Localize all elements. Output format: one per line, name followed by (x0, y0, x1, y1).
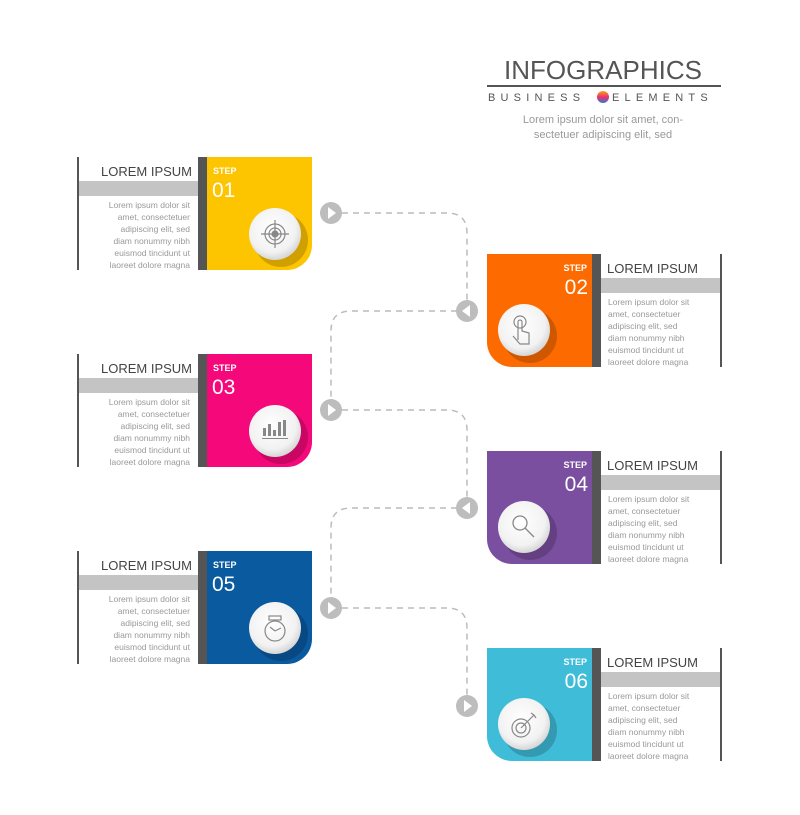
connector path (331, 213, 467, 695)
step 02: STEP (563, 263, 587, 273)
step 01: adipiscing elit, sed (121, 224, 190, 234)
step 02: laoreet dolore magna (608, 357, 689, 367)
step 03: Lorem ipsum dolor sit (109, 397, 191, 407)
step 05: laoreet dolore magna (110, 654, 190, 664)
step 03: 03 (212, 376, 235, 399)
title: sectetuer adipiscing elit, sed (534, 129, 672, 141)
step 02 (487, 254, 722, 367)
title: INFOGRAPHICS (504, 55, 702, 85)
step 06: laoreet dolore magna (608, 751, 689, 761)
icon: hand pointer (513, 316, 529, 344)
title: BUSINESS (488, 92, 585, 104)
step 06: adipiscing elit, sed (608, 715, 678, 725)
step 06: euismod tincidunt ut (608, 739, 684, 749)
step 02: amet, consectetuer (608, 309, 680, 319)
step 05: 05 (212, 573, 235, 596)
step 01: 01 (212, 179, 235, 202)
step 06: STEP (563, 657, 587, 667)
step 03: STEP (213, 363, 237, 373)
step 02: LOREM IPSUM (607, 261, 698, 276)
step 04: laoreet dolore magna (608, 554, 689, 564)
step 03: diam nonummy nibh (113, 433, 190, 443)
icon: magnifier (513, 516, 534, 537)
step 01 (77, 157, 312, 270)
step 03 (77, 354, 312, 467)
step 01: STEP (213, 166, 237, 176)
step 04: Lorem ipsum dolor sit (608, 494, 690, 504)
step 06: 06 (565, 670, 588, 693)
step 01: Lorem ipsum dolor sit (109, 200, 191, 210)
step 04: adipiscing elit, sed (608, 518, 678, 528)
step 06: Lorem ipsum dolor sit (608, 691, 690, 701)
step 02: diam nonummy nibh (608, 333, 685, 343)
step 03: amet, consectetuer (118, 409, 190, 419)
step 06: amet, consectetuer (608, 703, 680, 713)
step 05: LOREM IPSUM (101, 558, 192, 573)
step 04: LOREM IPSUM (607, 458, 698, 473)
step 05: diam nonummy nibh (113, 630, 190, 640)
icon: bar chart (262, 420, 288, 439)
step 04: euismod tincidunt ut (608, 542, 684, 552)
icon: target (261, 220, 289, 248)
step 03: adipiscing elit, sed (121, 421, 190, 431)
step 04 (487, 451, 722, 564)
step 03: LOREM IPSUM (101, 361, 192, 376)
step 03: laoreet dolore magna (110, 457, 190, 467)
step 06: diam nonummy nibh (608, 727, 685, 737)
step 06 (487, 648, 722, 761)
step 04: 04 (565, 473, 588, 496)
icon: dart target (512, 713, 536, 737)
step 05: euismod tincidunt ut (114, 642, 191, 652)
step 06: LOREM IPSUM (607, 655, 698, 670)
icon: stopwatch (265, 616, 285, 641)
step 05: Lorem ipsum dolor sit (109, 594, 191, 604)
step 04: amet, consectetuer (608, 506, 680, 516)
step 01: euismod tincidunt ut (114, 248, 191, 258)
title: ELEMENTS (612, 92, 713, 104)
step 04: STEP (563, 460, 587, 470)
step 02: Lorem ipsum dolor sit (608, 297, 690, 307)
step 01: amet, consectetuer (118, 212, 190, 222)
step 02: 02 (565, 276, 588, 299)
step 05: adipiscing elit, sed (121, 618, 190, 628)
step 03: euismod tincidunt ut (114, 445, 191, 455)
step 05: amet, consectetuer (118, 606, 190, 616)
step 02: euismod tincidunt ut (608, 345, 684, 355)
title (487, 55, 721, 141)
step 02: adipiscing elit, sed (608, 321, 678, 331)
step 01: diam nonummy nibh (113, 236, 190, 246)
title: Lorem ipsum dolor sit amet, con- (523, 114, 683, 126)
step 04: diam nonummy nibh (608, 530, 685, 540)
step 01: LOREM IPSUM (101, 164, 192, 179)
step 05 (77, 551, 312, 664)
arrow markers (320, 202, 478, 717)
step 05: STEP (213, 560, 237, 570)
step 01: laoreet dolore magna (110, 260, 190, 270)
